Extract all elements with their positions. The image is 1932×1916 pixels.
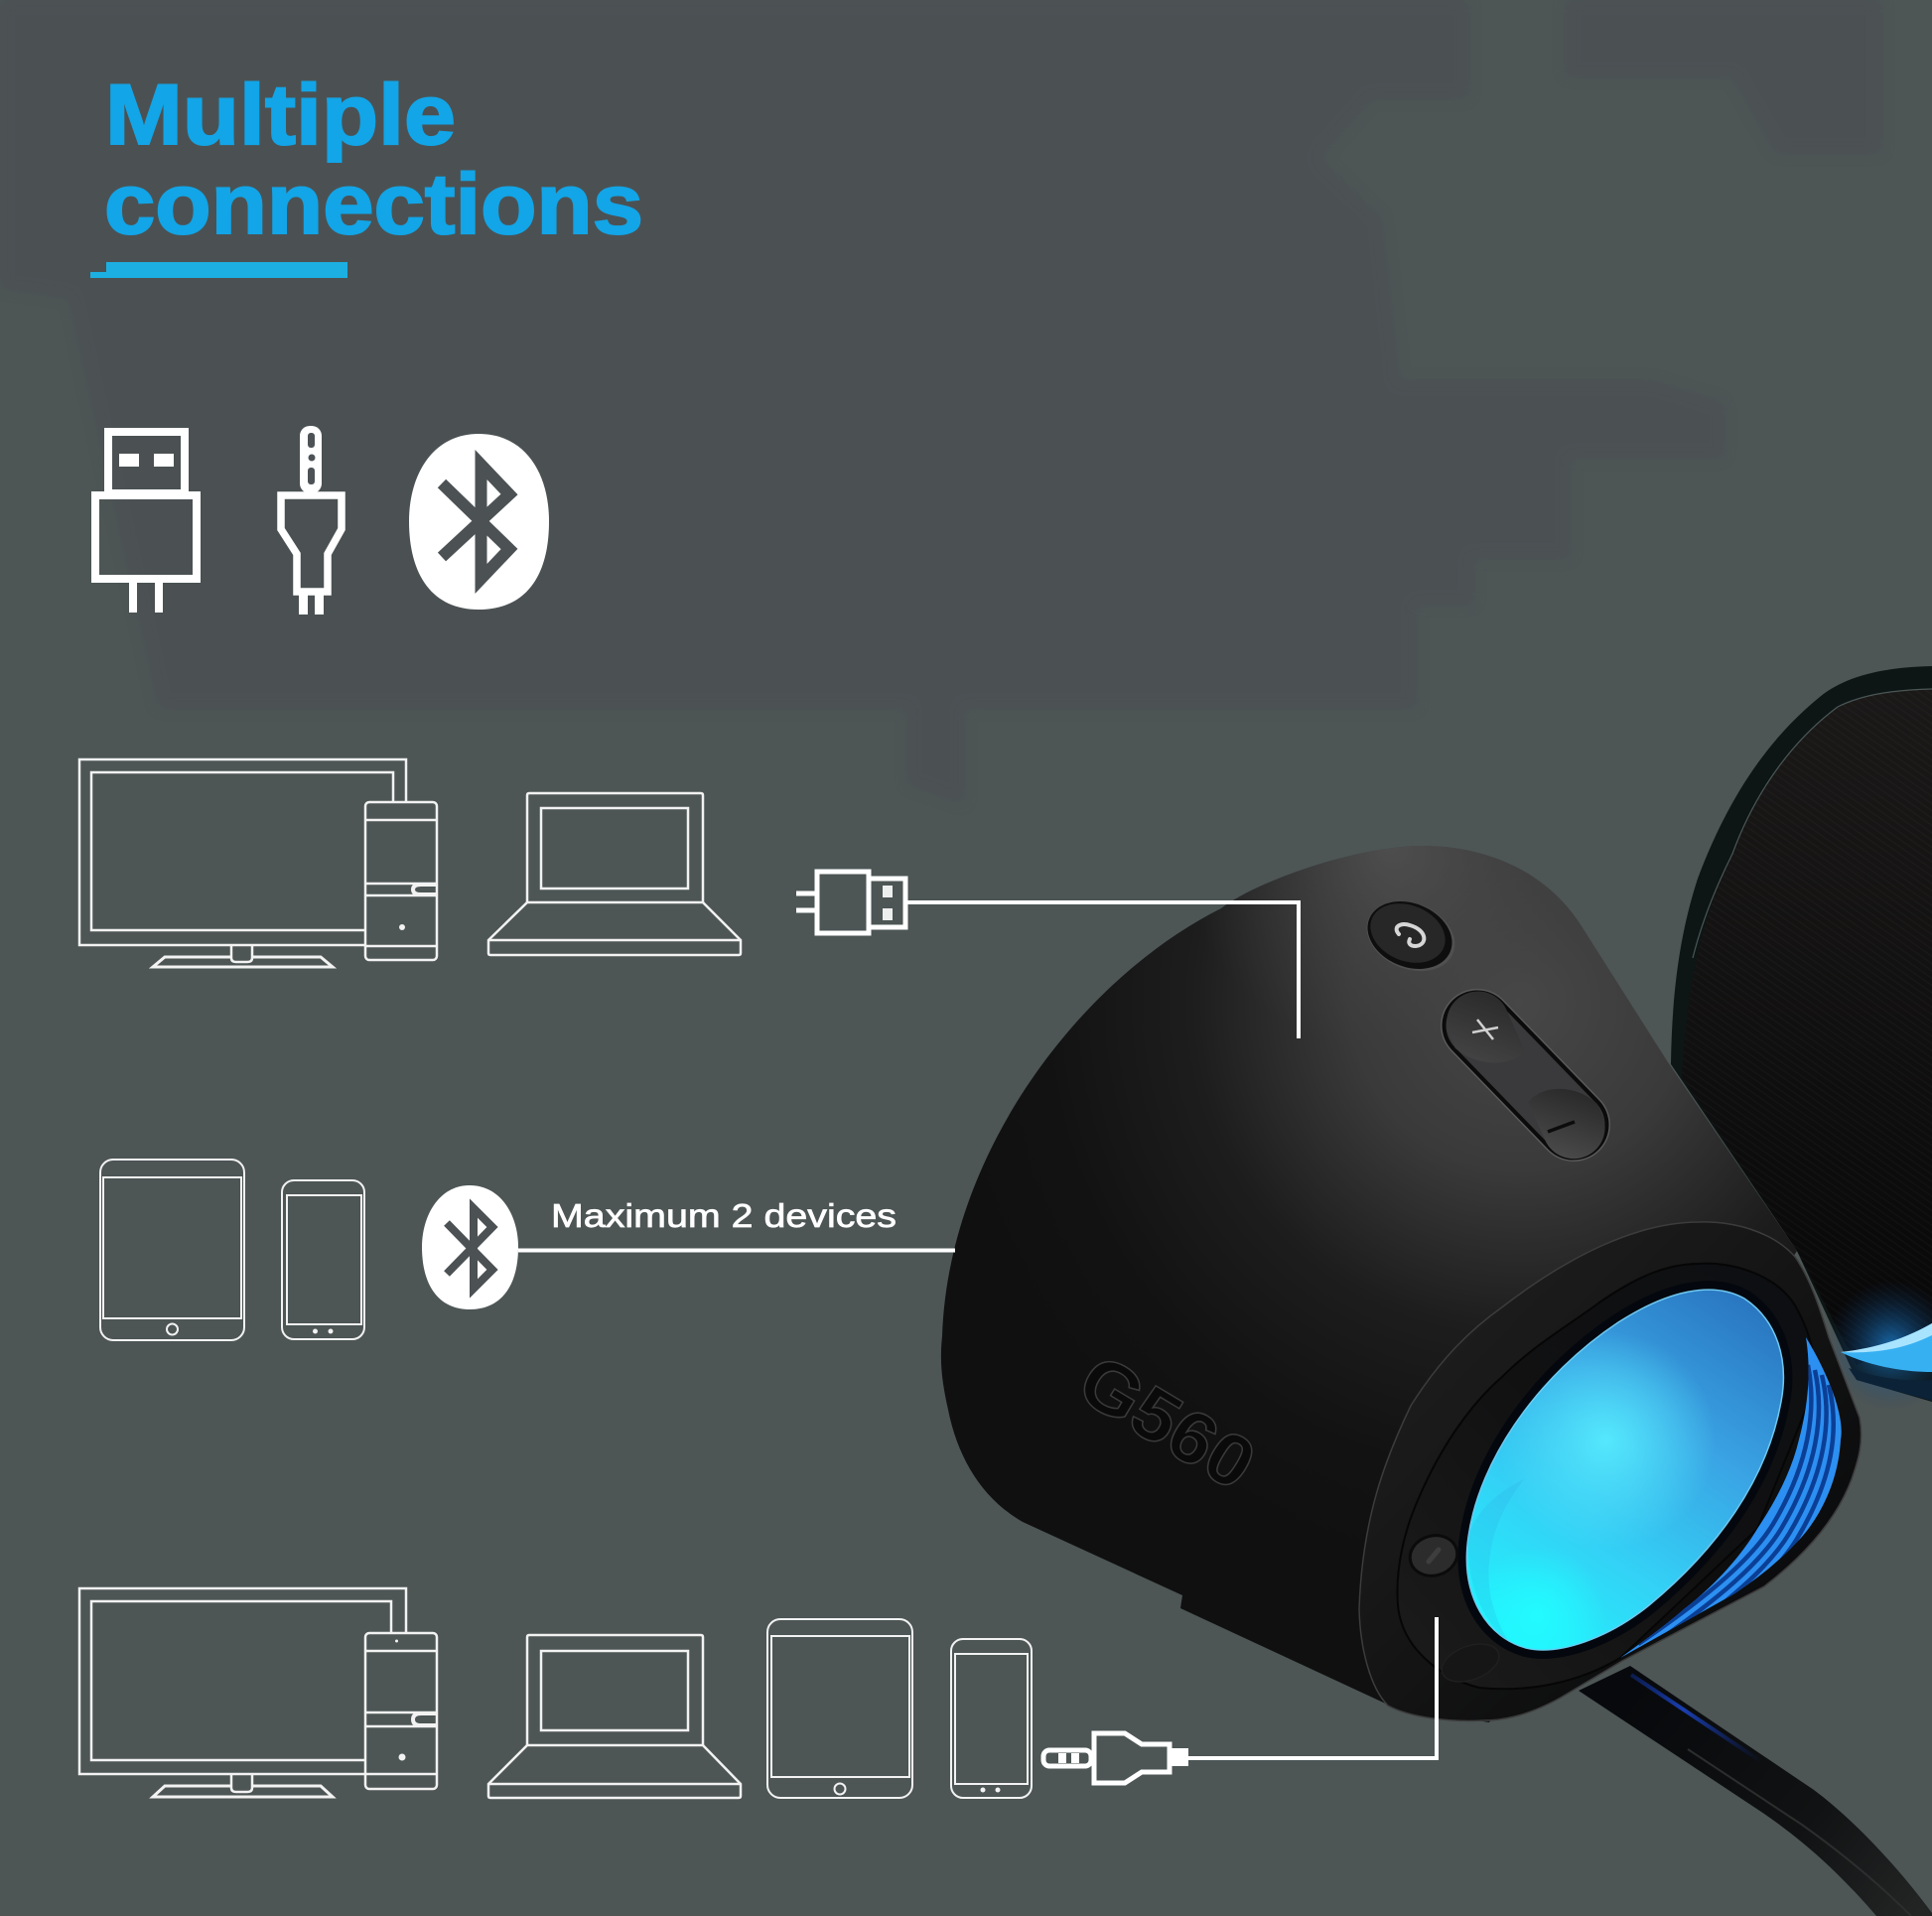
connector line: Bluetooth to speaker (518, 1249, 955, 1253)
device: laptop (USB) (488, 793, 741, 955)
icon: USB connector (796, 872, 905, 933)
device: phone (Bluetooth) (282, 1180, 364, 1339)
device: tablet (Bluetooth) (100, 1160, 244, 1340)
connector line: USB to speaker (905, 902, 1299, 1038)
title: connections (104, 157, 643, 252)
ring button (1406, 1530, 1461, 1581)
speaker cable (1579, 1666, 1932, 1916)
main speaker (941, 846, 1862, 1722)
label: Maximum 2 devices: Maximum 2 devices (551, 1197, 897, 1234)
front ring (1359, 1222, 1862, 1720)
inner plate (1397, 1264, 1815, 1689)
title: Multiple (105, 68, 456, 163)
device group: desktop and tower (USB) (79, 759, 437, 967)
title underline (90, 262, 347, 278)
device: laptop (aux) (488, 1635, 741, 1798)
device: phone (aux) (951, 1639, 1032, 1798)
power button (1356, 889, 1465, 984)
model name G560: G560 (1065, 1338, 1270, 1506)
title (104, 68, 643, 252)
light face (1466, 1290, 1783, 1686)
connector line: aux to speaker (1188, 1617, 1437, 1758)
second speaker (1671, 666, 1932, 1410)
light stripes (1620, 1337, 1842, 1658)
top highlight (941, 846, 1797, 1722)
volume down (1535, 1089, 1605, 1160)
device: tablet (aux) (767, 1619, 912, 1798)
icon: Bluetooth large (409, 434, 549, 610)
icon: aux plug (1043, 1733, 1188, 1783)
icon: Bluetooth small (422, 1185, 518, 1309)
volume up (1448, 991, 1513, 1050)
icon: USB plug (95, 432, 197, 613)
icon: audio jack (281, 426, 342, 615)
volume control (1441, 989, 1610, 1162)
device group: desktop and tower (aux) (79, 1588, 437, 1797)
ring port (1437, 1637, 1504, 1689)
speaker body (941, 846, 1797, 1722)
